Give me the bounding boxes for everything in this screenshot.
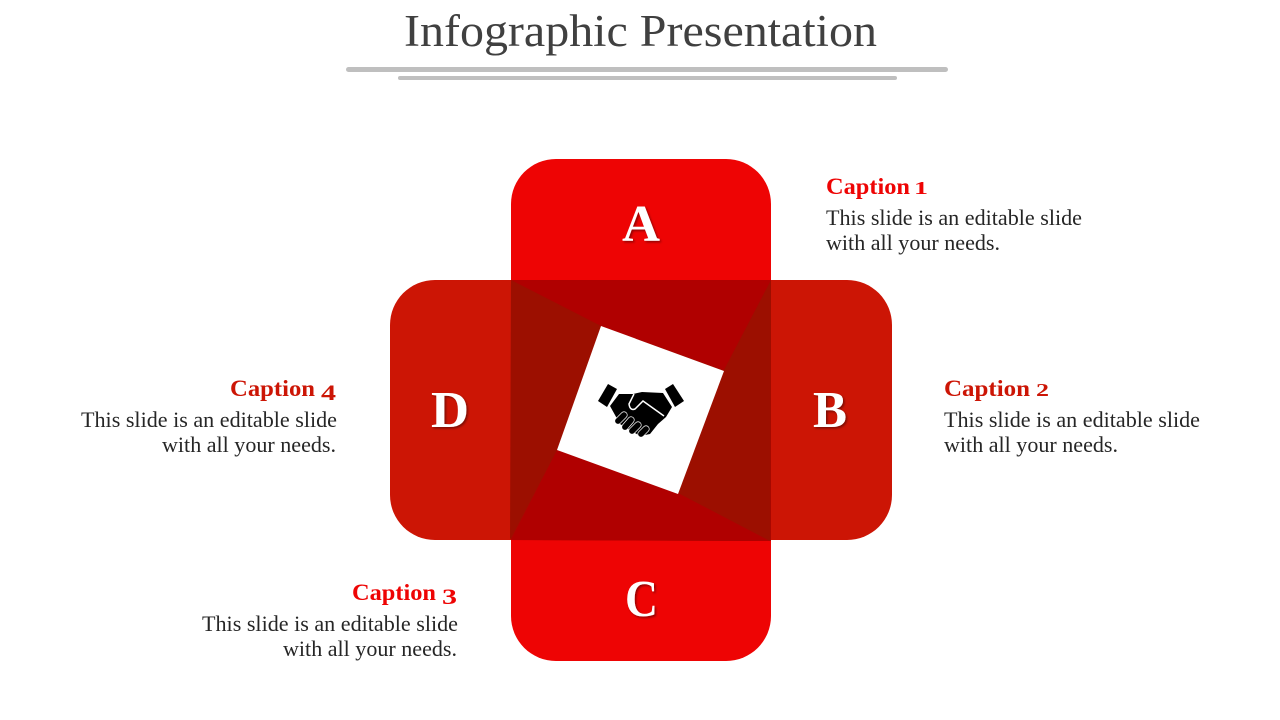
caption 4: Caption xyxy=(230,376,315,401)
overlap: bottom xyxy=(511,450,771,541)
caption 1: 1 xyxy=(914,178,928,198)
cross diagram xyxy=(390,159,892,661)
icon: handshake xyxy=(598,384,684,436)
caption 1: with all your needs. xyxy=(826,230,1000,255)
caption 4 xyxy=(81,376,337,457)
caption 3: Caption xyxy=(352,580,436,605)
caption 2: with all your needs. xyxy=(944,432,1118,457)
caption 4: 4 xyxy=(321,380,336,405)
caption 3: This slide is an editable slide xyxy=(202,611,458,636)
panel: B xyxy=(770,280,892,540)
overlap: top xyxy=(511,280,771,370)
overlap base xyxy=(511,280,771,541)
title underline xyxy=(346,67,948,80)
letter C: C xyxy=(625,571,658,628)
letter A: A xyxy=(622,196,660,253)
caption 3: 3 xyxy=(442,584,457,609)
caption 2 xyxy=(944,376,1200,457)
caption 3: with all your needs. xyxy=(283,636,457,661)
title: Infographic Presentation xyxy=(404,6,877,56)
panel: C xyxy=(511,539,771,661)
panel: A xyxy=(511,159,771,281)
caption 4: with all your needs. xyxy=(162,432,336,457)
letter B: B xyxy=(813,382,847,439)
caption 4: This slide is an editable slide xyxy=(81,407,337,432)
caption 1: Caption xyxy=(826,174,910,199)
caption 1 xyxy=(826,174,1082,255)
caption 2: This slide is an editable slide xyxy=(944,407,1200,432)
caption 3 xyxy=(202,580,458,661)
center white square xyxy=(557,326,724,494)
letter D: D xyxy=(431,382,469,439)
caption 2: Caption xyxy=(944,376,1030,401)
caption 1: This slide is an editable slide xyxy=(826,205,1082,230)
overlap: left xyxy=(510,280,601,540)
caption 2: 2 xyxy=(1036,380,1049,400)
panel: D xyxy=(390,280,512,540)
overlap: right xyxy=(678,280,771,541)
